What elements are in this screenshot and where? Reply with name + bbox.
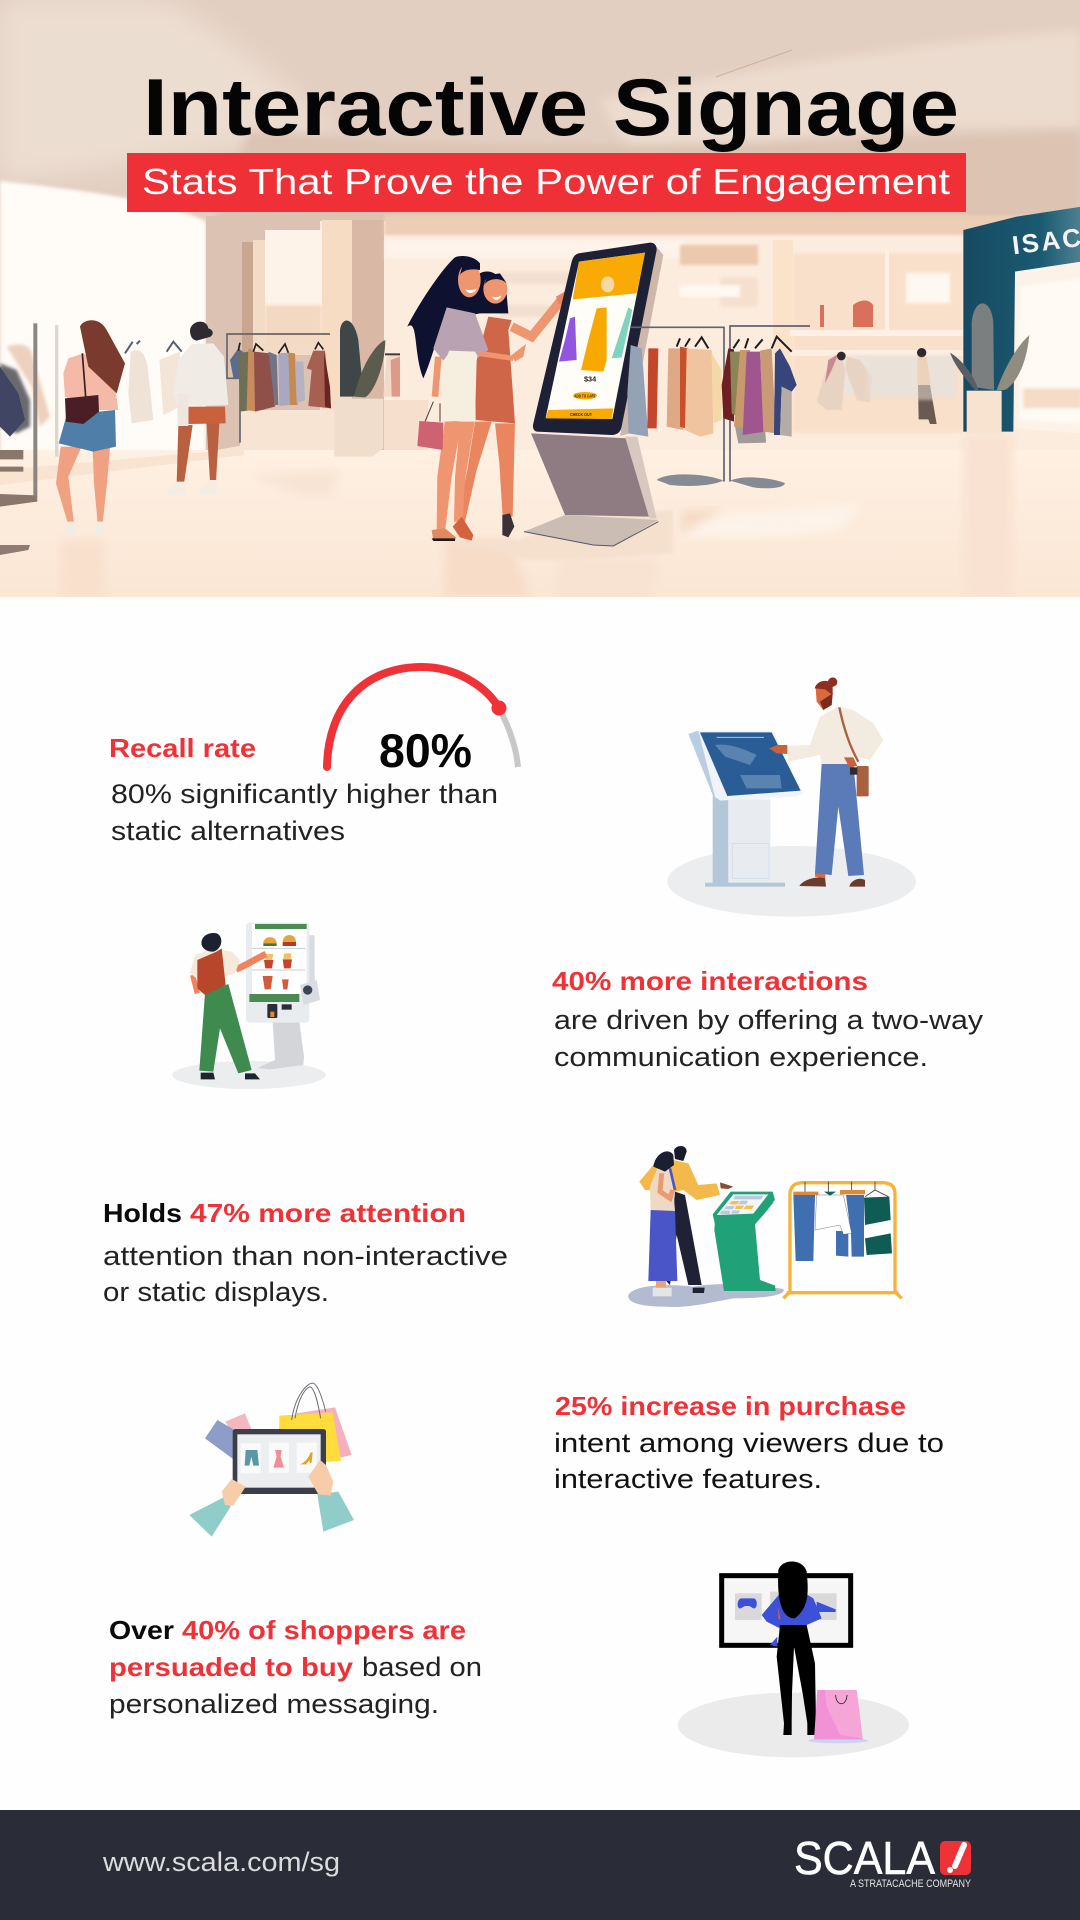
ground ellipse — [172, 1061, 326, 1089]
stat: holds 47% more attention — [103, 1198, 508, 1307]
shopper top — [63, 353, 118, 410]
white shirt — [815, 1195, 852, 1234]
isaca store front — [963, 207, 1080, 433]
price and buttons: $34 — [584, 375, 597, 384]
kiosk rim — [620, 245, 663, 436]
man's head — [674, 1146, 687, 1161]
green kiosk — [713, 1192, 776, 1291]
shopper skirt — [59, 410, 116, 452]
gauge chart 80%: 80% — [379, 724, 472, 777]
two women using the kiosk — [407, 256, 673, 560]
man's trousers — [667, 1192, 702, 1285]
man's jacket — [639, 1160, 720, 1200]
woman's arms and top — [762, 1593, 822, 1628]
icon: woman at food ordering kiosk — [172, 923, 326, 1089]
footer bar — [0, 1810, 1080, 1920]
woman's top — [650, 1168, 675, 1211]
icon: tablet shopping — [189, 1383, 354, 1537]
attention heading — [103, 1198, 466, 1228]
purchase body text: interactive features. — [554, 1464, 822, 1494]
second woman's legs — [462, 422, 515, 522]
skirt — [441, 351, 476, 422]
plant pot — [967, 391, 1002, 433]
man's shoes — [799, 877, 865, 887]
recall body text — [111, 779, 498, 846]
clothing rack: left store — [0, 323, 182, 555]
icon: couple at green kiosk with clothes rack — [628, 1146, 902, 1307]
scala logo: SCALA — [794, 1832, 935, 1884]
website url: www.scala.com/sg — [102, 1847, 340, 1877]
stat: 25% increase in purchase — [554, 1391, 944, 1494]
second woman's arm — [512, 302, 560, 337]
scala logo: A STRATACACHE COMPANY — [850, 1878, 972, 1890]
dress — [475, 317, 515, 423]
plant leaves — [972, 303, 994, 390]
shoulder bag — [839, 707, 869, 796]
icon: man at map kiosk — [667, 677, 916, 917]
kiosk map screen — [688, 731, 803, 801]
rack frame — [630, 326, 810, 482]
right hand and sleeve — [308, 1460, 354, 1532]
interactions body text: are driven by offering a two-way — [554, 1005, 984, 1035]
attention body text: or static displays. — [103, 1277, 329, 1307]
shopping bags — [297, 1407, 352, 1462]
purchase heading: 25% increase in purchase — [555, 1391, 906, 1421]
first woman's legs — [437, 420, 475, 532]
food items — [263, 935, 296, 989]
ground ellipse — [667, 846, 916, 917]
attention heading: 47% more attention — [190, 1198, 466, 1228]
kiosk base — [524, 515, 658, 546]
ground ellipse — [678, 1693, 909, 1757]
man's shirt — [787, 707, 883, 764]
woman's shoes — [653, 1288, 672, 1296]
recall body text: 80% significantly higher than — [111, 779, 498, 809]
rack feet — [657, 474, 785, 488]
woman's shoes — [201, 1073, 260, 1079]
shoppers line one: 40% of shoppers are — [182, 1615, 466, 1645]
shadow — [514, 510, 673, 559]
woman's hair — [653, 1151, 674, 1172]
handbag — [425, 402, 440, 422]
gauge chart 80% — [327, 667, 518, 777]
faces — [458, 263, 481, 297]
icon: woman at display with shopping bag — [678, 1561, 909, 1757]
clothes rack frame — [783, 1183, 902, 1298]
interactions body text: communication experience. — [554, 1042, 928, 1072]
long hair — [407, 256, 508, 378]
clothing rack: centre left — [227, 320, 400, 457]
kiosk frame — [533, 243, 657, 435]
kiosk stand — [257, 1022, 304, 1069]
left hand and sleeve — [189, 1479, 246, 1537]
woman's top — [190, 948, 240, 978]
hangers — [805, 1182, 888, 1197]
man's trousers — [815, 763, 864, 876]
stat: 40% of shoppers — [109, 1615, 482, 1719]
dresses on screen — [581, 307, 607, 372]
shopper shoes — [165, 480, 217, 495]
interactions body text — [554, 1005, 984, 1072]
woman's legs — [777, 1625, 817, 1735]
kiosk body — [246, 923, 320, 1023]
plant at store front — [950, 303, 1029, 433]
woman's hair — [778, 1561, 808, 1618]
interactive kiosk: CHECK OUT — [570, 412, 592, 418]
shoppers line two: persuaded to buy — [109, 1652, 354, 1682]
blouse — [433, 307, 488, 361]
interactive kiosk: ADD TO CART — [574, 394, 596, 400]
green garment — [864, 1197, 891, 1225]
attention body text: attention than non-interactive — [103, 1241, 508, 1271]
hero: shopping mall illustration — [0, 0, 1080, 597]
kiosk stand — [531, 433, 651, 517]
kiosk screen — [546, 253, 645, 419]
attention heading: Holds — [103, 1198, 182, 1228]
recall heading: Recall rate — [109, 733, 256, 763]
interactive kiosk — [524, 243, 663, 546]
tablet — [233, 1429, 326, 1494]
interactions heading: 40% more interactions — [552, 966, 868, 996]
woman's skirt — [648, 1210, 677, 1281]
shopper hair — [190, 322, 213, 341]
shopping bag — [808, 1690, 868, 1743]
shopper legs — [177, 423, 219, 483]
attention body text — [103, 1241, 508, 1307]
stat: 40% more interactions — [552, 966, 984, 1072]
mall ceiling and walls — [0, 0, 1080, 450]
shopper in white sweater — [165, 322, 228, 495]
stat: recall rate — [109, 667, 518, 846]
store floor — [0, 433, 1080, 597]
man's hands — [769, 745, 857, 767]
ground shape — [628, 1284, 784, 1307]
shoppers line two — [109, 1652, 482, 1682]
subtitle banner: Stats That Prove the Power of Engagement — [142, 161, 950, 202]
purchase body text: intent among viewers due to — [554, 1428, 944, 1458]
right clothes — [722, 348, 734, 422]
clothing rack: right — [627, 326, 957, 488]
background shoppers — [817, 353, 872, 410]
woman's arms — [236, 954, 266, 969]
shoppers line one: Over — [109, 1615, 174, 1645]
backpack — [197, 948, 226, 995]
left clothes — [627, 345, 648, 437]
subtitle banner — [127, 153, 966, 212]
display — [722, 1576, 851, 1647]
shopper sweater — [173, 343, 228, 406]
shopper handbag — [65, 395, 99, 424]
shoppers line three: personalized messaging. — [109, 1689, 439, 1719]
shopper in blue skirt — [56, 320, 125, 536]
credit cards — [225, 1413, 252, 1440]
shopper shoes — [67, 522, 104, 536]
shopper hair — [80, 320, 125, 393]
shoes — [432, 528, 456, 541]
man's head — [815, 677, 837, 710]
woman's head — [201, 933, 221, 952]
woman's trousers — [199, 984, 252, 1073]
shopper skirt — [188, 407, 226, 424]
purchase body text — [554, 1428, 944, 1494]
shopper legs — [56, 447, 110, 523]
first woman's arms — [478, 353, 513, 358]
kiosk pedestal — [705, 792, 785, 887]
recall body text: static alternatives — [111, 816, 345, 846]
title: Interactive Signage — [143, 63, 959, 153]
jeans — [793, 1195, 815, 1261]
shoppers line two: based on — [362, 1652, 482, 1682]
